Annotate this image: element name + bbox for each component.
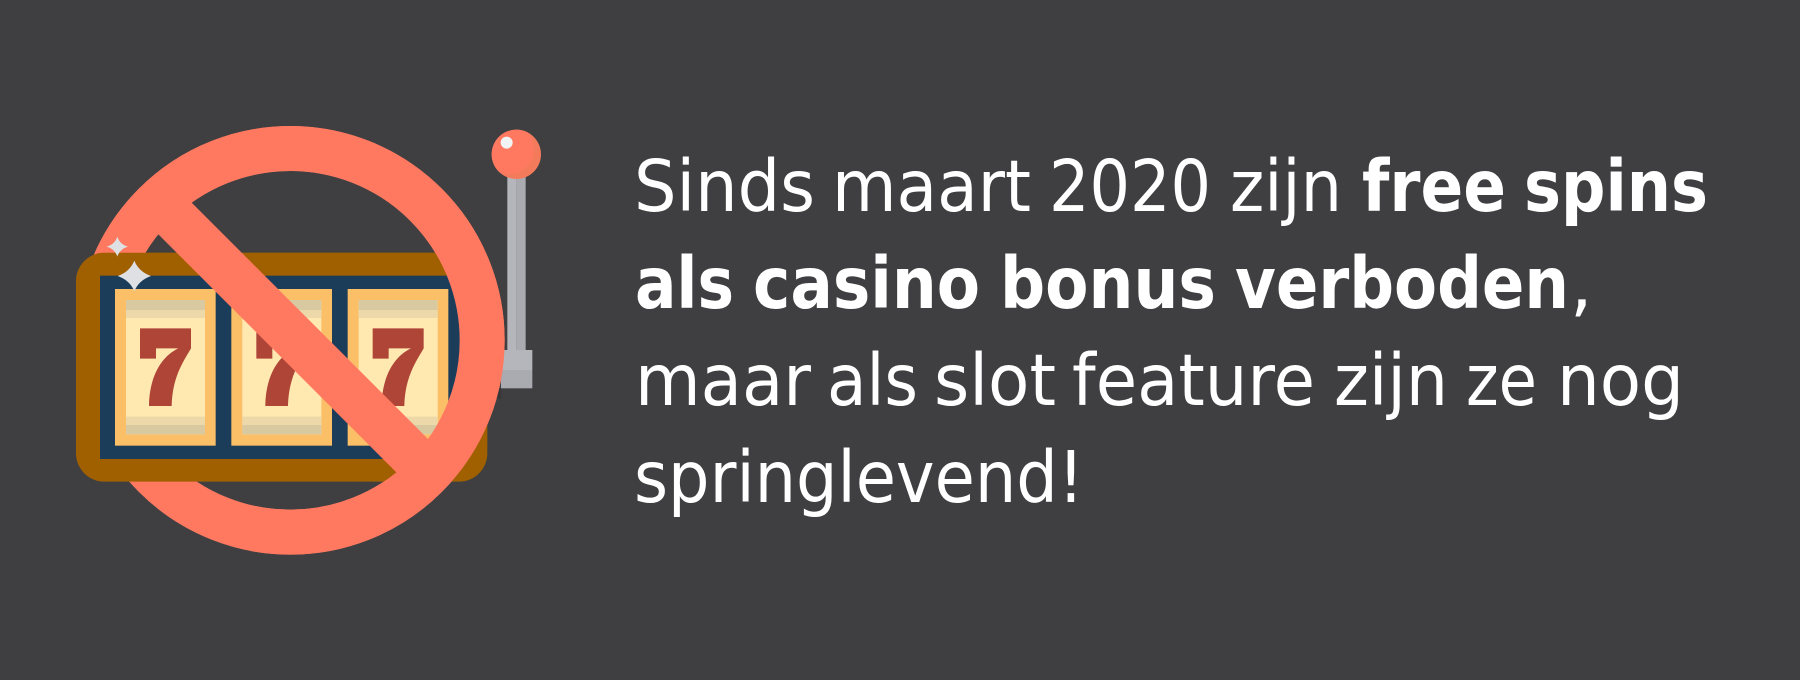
reel 2 bbox=[231, 289, 332, 446]
reel window bbox=[100, 276, 463, 459]
line 1: zijn bbox=[1230, 145, 1342, 228]
line 2 bbox=[635, 242, 1593, 325]
line 2: casino bbox=[753, 242, 980, 325]
line 2: als bbox=[635, 242, 734, 325]
icon: large sparkle bbox=[118, 261, 151, 291]
line 3: als bbox=[827, 339, 918, 422]
lever bbox=[492, 130, 541, 399]
icon: slot machine with prohibition sign bbox=[76, 130, 541, 532]
line 3: feature bbox=[1072, 339, 1315, 422]
slot machine cabinet bbox=[76, 253, 487, 482]
prohibition ring, back layer bbox=[98, 148, 482, 532]
line 1: maart bbox=[832, 145, 1031, 228]
line 3: slot bbox=[934, 339, 1056, 422]
line 3: maar bbox=[635, 339, 812, 422]
line 2: , bbox=[1570, 242, 1593, 325]
line 1: Sinds bbox=[634, 145, 815, 228]
prohibition ring, front layer bbox=[98, 148, 482, 532]
line 1 bbox=[634, 145, 1708, 228]
line 3 bbox=[635, 339, 1684, 422]
line 3: nog bbox=[1557, 339, 1684, 422]
prohibition slash bbox=[137, 181, 450, 493]
line 1: free bbox=[1362, 145, 1506, 228]
reel 3 bbox=[348, 289, 448, 446]
text block: message bbox=[634, 145, 1708, 519]
line 1: spins bbox=[1524, 145, 1708, 228]
icon: small sparkle bbox=[107, 237, 128, 257]
line 2: verboden bbox=[1235, 242, 1569, 325]
line 4: springlevend! bbox=[634, 436, 1084, 519]
line 1: 2020 bbox=[1049, 145, 1211, 228]
line 3: zijn bbox=[1334, 339, 1448, 422]
reel 1 bbox=[115, 289, 216, 446]
line 2: bonus bbox=[1000, 242, 1216, 325]
line 3: ze bbox=[1466, 339, 1537, 422]
